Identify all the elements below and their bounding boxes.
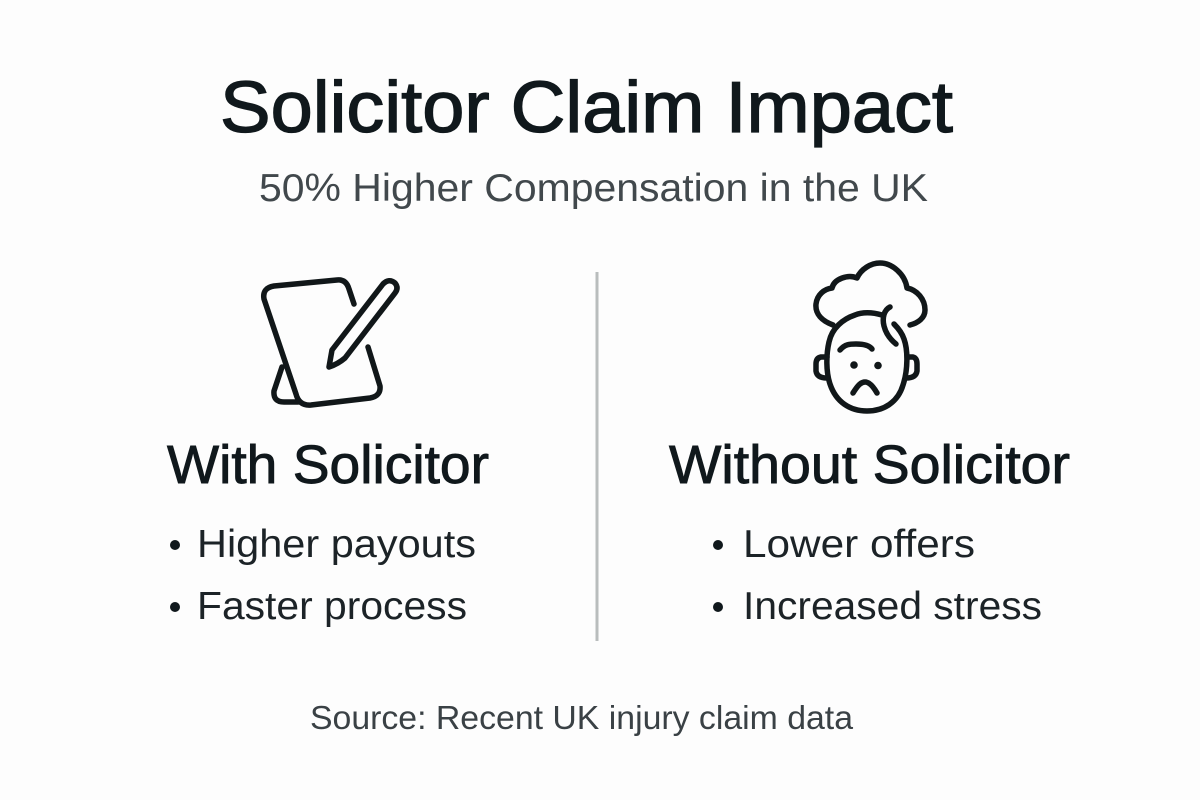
list: with solicitor benefits: Faster process (197, 585, 467, 628)
heading: with solicitor: With Solicitor (167, 435, 489, 495)
list: without solicitor drawbacks (713, 523, 1042, 628)
source note: Source: Recent UK injury claim data (310, 699, 854, 736)
title: Solicitor Claim Impact (220, 68, 953, 148)
list: with solicitor benefits: Higher payouts (197, 523, 476, 566)
list: without solicitor drawbacks: Increased stress (743, 585, 1042, 628)
heading: without solicitor: Without Solicitor (669, 435, 1070, 495)
subtitle: 50% Higher Compensation in the UK (259, 167, 928, 210)
icon: face eyes (850, 361, 882, 369)
list: without solicitor drawbacks: Lower offers (743, 523, 975, 566)
icon: stressed face with cloud (816, 263, 925, 411)
list: with solicitor benefits (170, 523, 476, 628)
vertical divider (596, 272, 598, 641)
icon: notepad and pen (264, 280, 397, 405)
